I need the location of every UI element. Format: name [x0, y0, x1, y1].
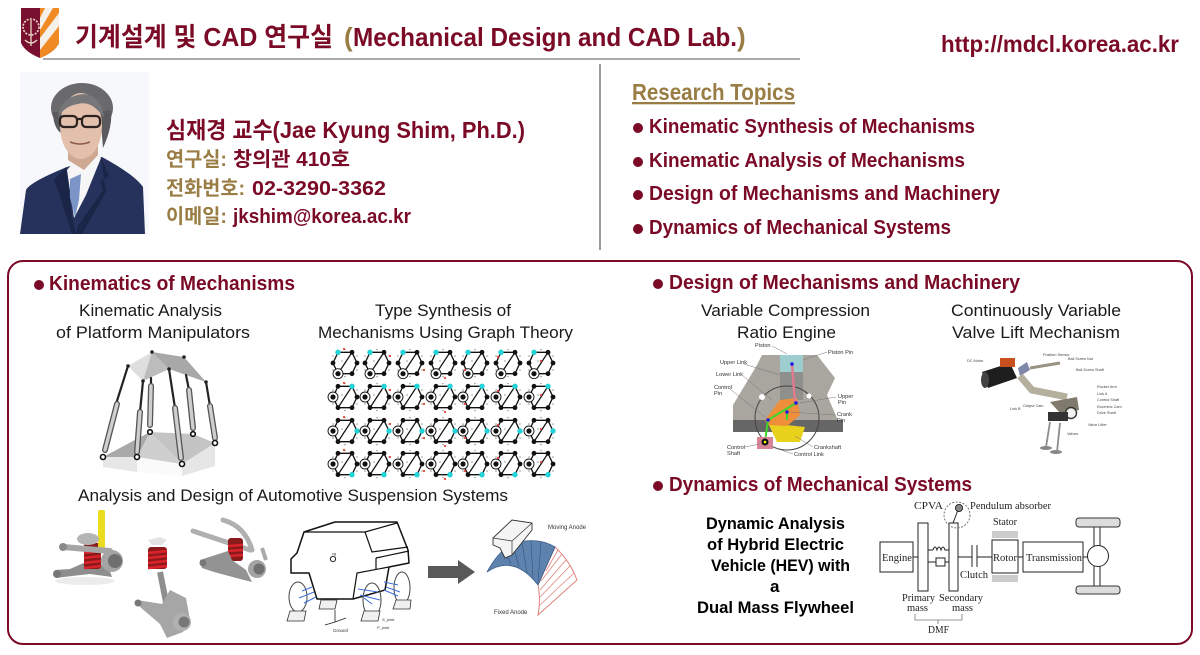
diagram: variable compression ratio engine: Pin [714, 391, 722, 397]
heading: kinematics of mechanisms: Kinematics of Mechanisms [49, 273, 295, 295]
diagram: dual mass flywheel powertrain: mass [952, 602, 973, 614]
topic list: Kinematic Analysis of Mechanisms [649, 150, 965, 172]
heading: research topics: Research Topics [632, 79, 795, 105]
caption: type synthesis: Mechanisms Using Graph Theory [318, 323, 573, 342]
diagram: dual mass flywheel powertrain: Engine [882, 552, 912, 564]
professor contact details [166, 117, 525, 228]
diagram: variable compression ratio engine [714, 343, 853, 458]
diagram: dual mass flywheel powertrain: DMF [928, 624, 949, 636]
professor contact details: 창의관 410호 [233, 148, 350, 171]
heading: dynamics of mechanical systems: Dynamics of Mechanical Systems [669, 474, 972, 496]
logo: university shield [21, 8, 59, 58]
caption: kinematic analysis: of Platform Manipulators [56, 323, 250, 342]
diagram: dual mass flywheel powertrain: Clutch [960, 569, 988, 581]
diagram: variable compression ratio engine: Pin [837, 418, 845, 424]
diagram: variable compression ratio engine: Lower Link [716, 372, 743, 378]
diagram: variable valve lift mechanism: Link B [1010, 407, 1021, 411]
diagram: vehicle suspension model: S_joint [382, 617, 395, 622]
title [75, 22, 746, 52]
diagram: variable valve lift mechanism: Ball Screw Nut [1068, 357, 1094, 361]
caption: kinematic analysis: Kinematic Analysis [79, 301, 222, 320]
diagram: variable compression ratio engine: Upper [838, 394, 853, 400]
caption: type synthesis [318, 301, 573, 342]
caption: automotive suspension: Analysis and Design of Automotive Suspension Systems [78, 486, 508, 505]
caption: kinematic analysis [56, 301, 250, 342]
diagram: variable valve lift mechanism: DC Motor [967, 359, 984, 363]
diagram: platform manipulator [100, 350, 218, 476]
text block: dynamic analysis of HEV: Dynamic Analysis [706, 514, 845, 533]
diagram: variable valve lift mechanism: Ball Screw Shaft [1076, 368, 1105, 372]
title: ) [737, 22, 746, 52]
diagram: vehicle suspension model [287, 522, 411, 633]
text block: dynamic analysis of HEV [697, 514, 854, 617]
professor contact details: 연구실: [166, 148, 227, 171]
diagram: vehicle suspension model: P_joint [377, 625, 390, 630]
caption: type synthesis: Type Synthesis of [375, 301, 511, 320]
diagram: variable valve lift mechanism: Position Sensor [1043, 353, 1070, 357]
diagram: variable valve lift mechanism: Rocker Arm [1097, 385, 1117, 389]
diagram: graph theory mechanism grid [328, 348, 556, 480]
professor contact details: 전화번호: [166, 177, 245, 200]
diagram: variable valve lift mechanism: Control Shaft [1097, 398, 1120, 402]
caption: valve lift: Continuously Variable [951, 301, 1121, 320]
title: ( [344, 22, 353, 52]
caption: valve lift [951, 301, 1121, 342]
diagram: vehicle suspension model: cg [332, 551, 336, 556]
professor portrait [20, 72, 149, 234]
diagram: anode track: Fixed Anode [494, 610, 528, 616]
diagram: variable compression ratio engine: Crank [837, 412, 852, 418]
diagram: dual mass flywheel powertrain: Stator [993, 516, 1017, 528]
title: Mechanical Design and CAD Lab. [353, 22, 737, 52]
text block: dynamic analysis of HEV: a [770, 577, 780, 596]
caption: variable compression: Ratio Engine [737, 323, 836, 342]
diagram: dual mass flywheel powertrain: CPVA [914, 500, 943, 512]
diagram: variable valve lift mechanism: Valves [1067, 432, 1078, 436]
caption: variable compression: Variable Compression [701, 301, 870, 320]
diagram: dual mass flywheel powertrain: mass [907, 602, 928, 614]
diagram: dual mass flywheel powertrain: Rotor [993, 552, 1017, 564]
diagram: variable valve lift mechanism: Link A [1097, 392, 1108, 396]
diagram: suspension assembly 1 [53, 510, 123, 585]
diagram: variable valve lift mechanism [967, 353, 1122, 454]
diagram: variable compression ratio engine: Shaft [727, 451, 741, 457]
diagram: variable valve lift mechanism: Drive Shaft [1097, 411, 1117, 415]
arrow: model to anode [428, 560, 475, 584]
diagram: dual mass flywheel powertrain: Pendulum absorber [970, 500, 1051, 512]
diagram: variable compression ratio engine: Pin [838, 400, 846, 406]
diagram: variable compression ratio engine: Piston [755, 343, 771, 349]
diagram: vehicle suspension model: Ground [333, 628, 349, 633]
diagram: variable valve lift mechanism: Eccentric Cam [1097, 405, 1122, 409]
diagram: variable compression ratio engine: Piston Pin [828, 350, 853, 356]
diagram: variable compression ratio engine: Control Link [794, 452, 824, 458]
text block: dynamic analysis of HEV: Vehicle (HEV) with [711, 556, 850, 575]
professor contact details: 이메일: [166, 205, 227, 228]
panel: research details frame [8, 261, 1192, 644]
caption: valve lift: Valve Lift Mechanism [952, 323, 1120, 342]
topic list: Kinematic Synthesis of Mechanisms [649, 116, 975, 138]
diagram: variable valve lift mechanism: Output Cam [1023, 404, 1043, 408]
diagram: anode track [487, 520, 587, 616]
professor contact details: 심재경 교수(Jae Kyung Shim, Ph.D.) [166, 117, 525, 143]
text block: dynamic analysis of HEV: Dual Mass Flywheel [697, 598, 854, 617]
website url: http://mdcl.korea.ac.kr [941, 31, 1179, 57]
topic list: Dynamics of Mechanical Systems [649, 217, 951, 239]
diagram: dual mass flywheel powertrain: Secondary [939, 592, 983, 604]
professor contact details: 02-3290-3362 [252, 178, 386, 200]
diagram: variable compression ratio engine: Control [727, 445, 745, 451]
diagram: dual mass flywheel powertrain [880, 500, 1120, 636]
diagram: variable valve lift mechanism: Valve Lifter [1088, 423, 1107, 427]
heading: design of mechanisms: Design of Mechanisms and Machinery [669, 272, 1021, 294]
diagram: variable compression ratio engine: Control [714, 385, 732, 391]
professor contact details: jkshim@korea.ac.kr [232, 206, 411, 228]
caption: variable compression [701, 301, 870, 342]
topic list: Design of Mechanisms and Machinery [649, 183, 1001, 205]
text block: dynamic analysis of HEV: of Hybrid Electric [707, 535, 844, 554]
panel: research topics [632, 79, 1001, 239]
diagram: suspension assembly 2 [134, 537, 191, 638]
topic list [633, 116, 1001, 239]
diagram: suspension assembly 3 [193, 520, 266, 582]
diagram: dual mass flywheel powertrain: Primary [902, 592, 935, 604]
diagram: variable compression ratio engine: Crankshaft [814, 445, 841, 451]
diagram: variable compression ratio engine: Upper Link [720, 360, 747, 366]
diagram: anode track: Moving Anode [548, 525, 587, 531]
title: 기계설계 및 CAD 연구실 [75, 22, 333, 52]
diagram: dual mass flywheel powertrain: Transmission [1026, 552, 1082, 564]
